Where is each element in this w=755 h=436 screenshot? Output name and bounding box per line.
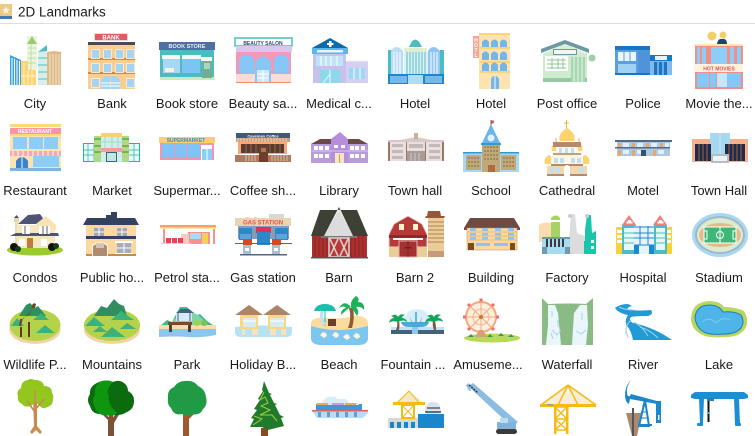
label: Coffee sh... bbox=[230, 183, 296, 198]
icon: hotel tower: T bbox=[474, 48, 478, 54]
item: Restaurant bbox=[3, 124, 67, 198]
icon: amusement park bbox=[463, 298, 520, 342]
icon: petrol station bbox=[160, 225, 216, 244]
icon: hospital bbox=[616, 215, 672, 254]
item: Condos bbox=[7, 214, 63, 285]
label: Restaurant bbox=[3, 183, 67, 198]
icon: wildlife park bbox=[10, 303, 60, 344]
item: Town hall bbox=[388, 133, 444, 198]
item: City bbox=[10, 36, 61, 111]
icon: cathedral bbox=[544, 120, 590, 176]
item: Beauty salon bbox=[229, 38, 297, 111]
item: Coffee shop bbox=[230, 133, 296, 198]
label: Petrol sta... bbox=[154, 270, 220, 285]
label: Gas station bbox=[230, 270, 296, 285]
icon: cruise ship bbox=[312, 397, 368, 418]
item: Cathedral bbox=[539, 120, 595, 198]
item: Public house bbox=[80, 212, 144, 285]
label: Barn 2 bbox=[396, 270, 434, 285]
label: Public ho... bbox=[80, 270, 144, 285]
icon: oil pump jack bbox=[625, 380, 661, 436]
icon: fountain bbox=[389, 309, 444, 334]
icon: factory bbox=[539, 214, 596, 254]
icon: town hall modern bbox=[692, 133, 748, 163]
item: School bbox=[463, 120, 519, 198]
icon: post office bbox=[541, 40, 596, 82]
icon: tree dark green bbox=[88, 380, 134, 436]
icon: barn with silo bbox=[389, 211, 445, 257]
icon: lake bbox=[691, 301, 747, 337]
label: Hotel bbox=[476, 96, 506, 111]
label: Barn bbox=[325, 270, 353, 285]
item: Stadium bbox=[692, 213, 748, 285]
icon: park bbox=[159, 307, 216, 337]
icon: city bbox=[10, 36, 61, 85]
icon: market bbox=[83, 133, 140, 162]
item: Movie theater bbox=[685, 32, 753, 111]
icon: school bbox=[463, 120, 519, 172]
icon: building bbox=[464, 218, 520, 250]
label: Beach bbox=[321, 357, 357, 372]
label: Town hall bbox=[388, 183, 442, 198]
item: Waterfall bbox=[542, 298, 593, 372]
label: Town Hall bbox=[691, 183, 747, 198]
icon: library bbox=[311, 132, 368, 163]
item: River bbox=[615, 304, 672, 372]
label: River bbox=[628, 357, 659, 372]
label: Beauty sa... bbox=[229, 96, 297, 111]
item: Medical center bbox=[306, 38, 372, 111]
label: Movie the... bbox=[685, 96, 753, 111]
label: Supermar... bbox=[153, 183, 221, 198]
label: Fountain ... bbox=[380, 357, 446, 372]
label: Hotel bbox=[400, 96, 430, 111]
icon: beach bbox=[311, 296, 368, 345]
icon: pine tree bbox=[250, 381, 284, 436]
icon: bank: BANK bbox=[102, 36, 120, 42]
label: Market bbox=[92, 183, 132, 198]
item: Bank bbox=[88, 33, 135, 111]
label: Bank bbox=[97, 96, 127, 111]
icon: tower crane bbox=[540, 385, 596, 434]
icon: book store: BOOK STORE bbox=[169, 44, 206, 50]
icon: tree light green bbox=[17, 379, 53, 434]
icon: hotel tower: L bbox=[474, 53, 478, 59]
icon: coffee shop: Caveman Coffee bbox=[247, 134, 279, 138]
label: Waterfall bbox=[542, 357, 593, 372]
icon: movie theater: HOT MOVIES bbox=[703, 66, 735, 72]
icon: supermarket: SUPERMARKET bbox=[167, 138, 205, 144]
item: Motel bbox=[615, 140, 672, 198]
label: Holiday B... bbox=[230, 357, 296, 372]
item: Park bbox=[159, 307, 216, 372]
icon: holiday bungalow bbox=[235, 305, 292, 337]
item: Post office bbox=[537, 40, 597, 111]
label: Building bbox=[468, 270, 514, 285]
label: Park bbox=[174, 357, 201, 372]
item: Factory bbox=[539, 214, 596, 285]
label: Amuseme... bbox=[453, 357, 523, 372]
label: Post office bbox=[537, 96, 597, 111]
item: Petrol station bbox=[154, 225, 220, 285]
icon: restaurant: RESTAURANT bbox=[18, 129, 52, 135]
item: Holiday Bungalow bbox=[230, 305, 296, 372]
item: Hospital bbox=[616, 215, 672, 285]
icon: condos bbox=[7, 214, 63, 256]
label: Cathedral bbox=[539, 183, 595, 198]
icon: hotel tower: H bbox=[474, 38, 478, 44]
item: Building bbox=[464, 218, 520, 285]
icon: barn bbox=[311, 207, 368, 258]
label: Mountains bbox=[82, 357, 142, 372]
label: Condos bbox=[13, 270, 58, 285]
label: Medical c... bbox=[306, 96, 372, 111]
icon: public house bbox=[83, 212, 139, 256]
title: 2D Landmarks bbox=[18, 4, 106, 20]
label: City bbox=[24, 96, 47, 111]
item: Barn 2 bbox=[389, 211, 445, 285]
icon: gas station: GAS STATION bbox=[243, 220, 283, 226]
item: Mountains bbox=[82, 299, 142, 372]
icon: waterfall bbox=[542, 298, 593, 345]
icon: beauty salon: BEAUTY SALON bbox=[243, 41, 283, 47]
item: Fountain bbox=[380, 309, 446, 372]
icon: hotel tower: O bbox=[474, 43, 478, 49]
icon: mountains bbox=[84, 299, 140, 344]
label: Library bbox=[319, 183, 359, 198]
label: Factory bbox=[545, 270, 589, 285]
item: Police bbox=[615, 46, 672, 111]
label: Police bbox=[625, 96, 661, 111]
label: Motel bbox=[627, 183, 659, 198]
label: Stadium bbox=[695, 270, 743, 285]
icon: stadium bbox=[692, 213, 748, 257]
icon: river bbox=[615, 304, 672, 340]
item: Gas station bbox=[230, 214, 296, 285]
item: Amusement park bbox=[453, 298, 523, 372]
icon: hotel bbox=[388, 40, 444, 84]
label: Book store bbox=[156, 96, 218, 111]
icon: town hall bbox=[388, 133, 444, 161]
icon: hotel tower bbox=[473, 33, 510, 89]
icon: motel bbox=[615, 140, 672, 156]
icon: tree medium green bbox=[168, 381, 207, 436]
label: Wildlife P... bbox=[3, 357, 67, 372]
item: Lake bbox=[691, 301, 747, 372]
item: Library bbox=[311, 132, 368, 198]
item: Supermarket bbox=[153, 137, 221, 198]
item: Town Hall bbox=[691, 133, 748, 198]
icon: port crane bbox=[388, 391, 444, 428]
icon: gantry crane bbox=[691, 392, 748, 426]
label: Hospital bbox=[620, 270, 667, 285]
icon: police bbox=[615, 46, 672, 75]
label: School bbox=[471, 183, 511, 198]
item: Hotel bbox=[388, 40, 444, 111]
item: Beach bbox=[311, 296, 368, 372]
header icon: star bbox=[0, 4, 12, 19]
label: Lake bbox=[705, 357, 733, 372]
item: Hotel bbox=[473, 33, 510, 111]
icon: medical center bbox=[312, 38, 368, 83]
item: Barn bbox=[311, 207, 368, 285]
item: Book store bbox=[156, 42, 218, 111]
item: Market bbox=[83, 133, 140, 198]
icon: crawler crane bbox=[466, 383, 518, 434]
item: Wildlife park bbox=[3, 303, 67, 372]
